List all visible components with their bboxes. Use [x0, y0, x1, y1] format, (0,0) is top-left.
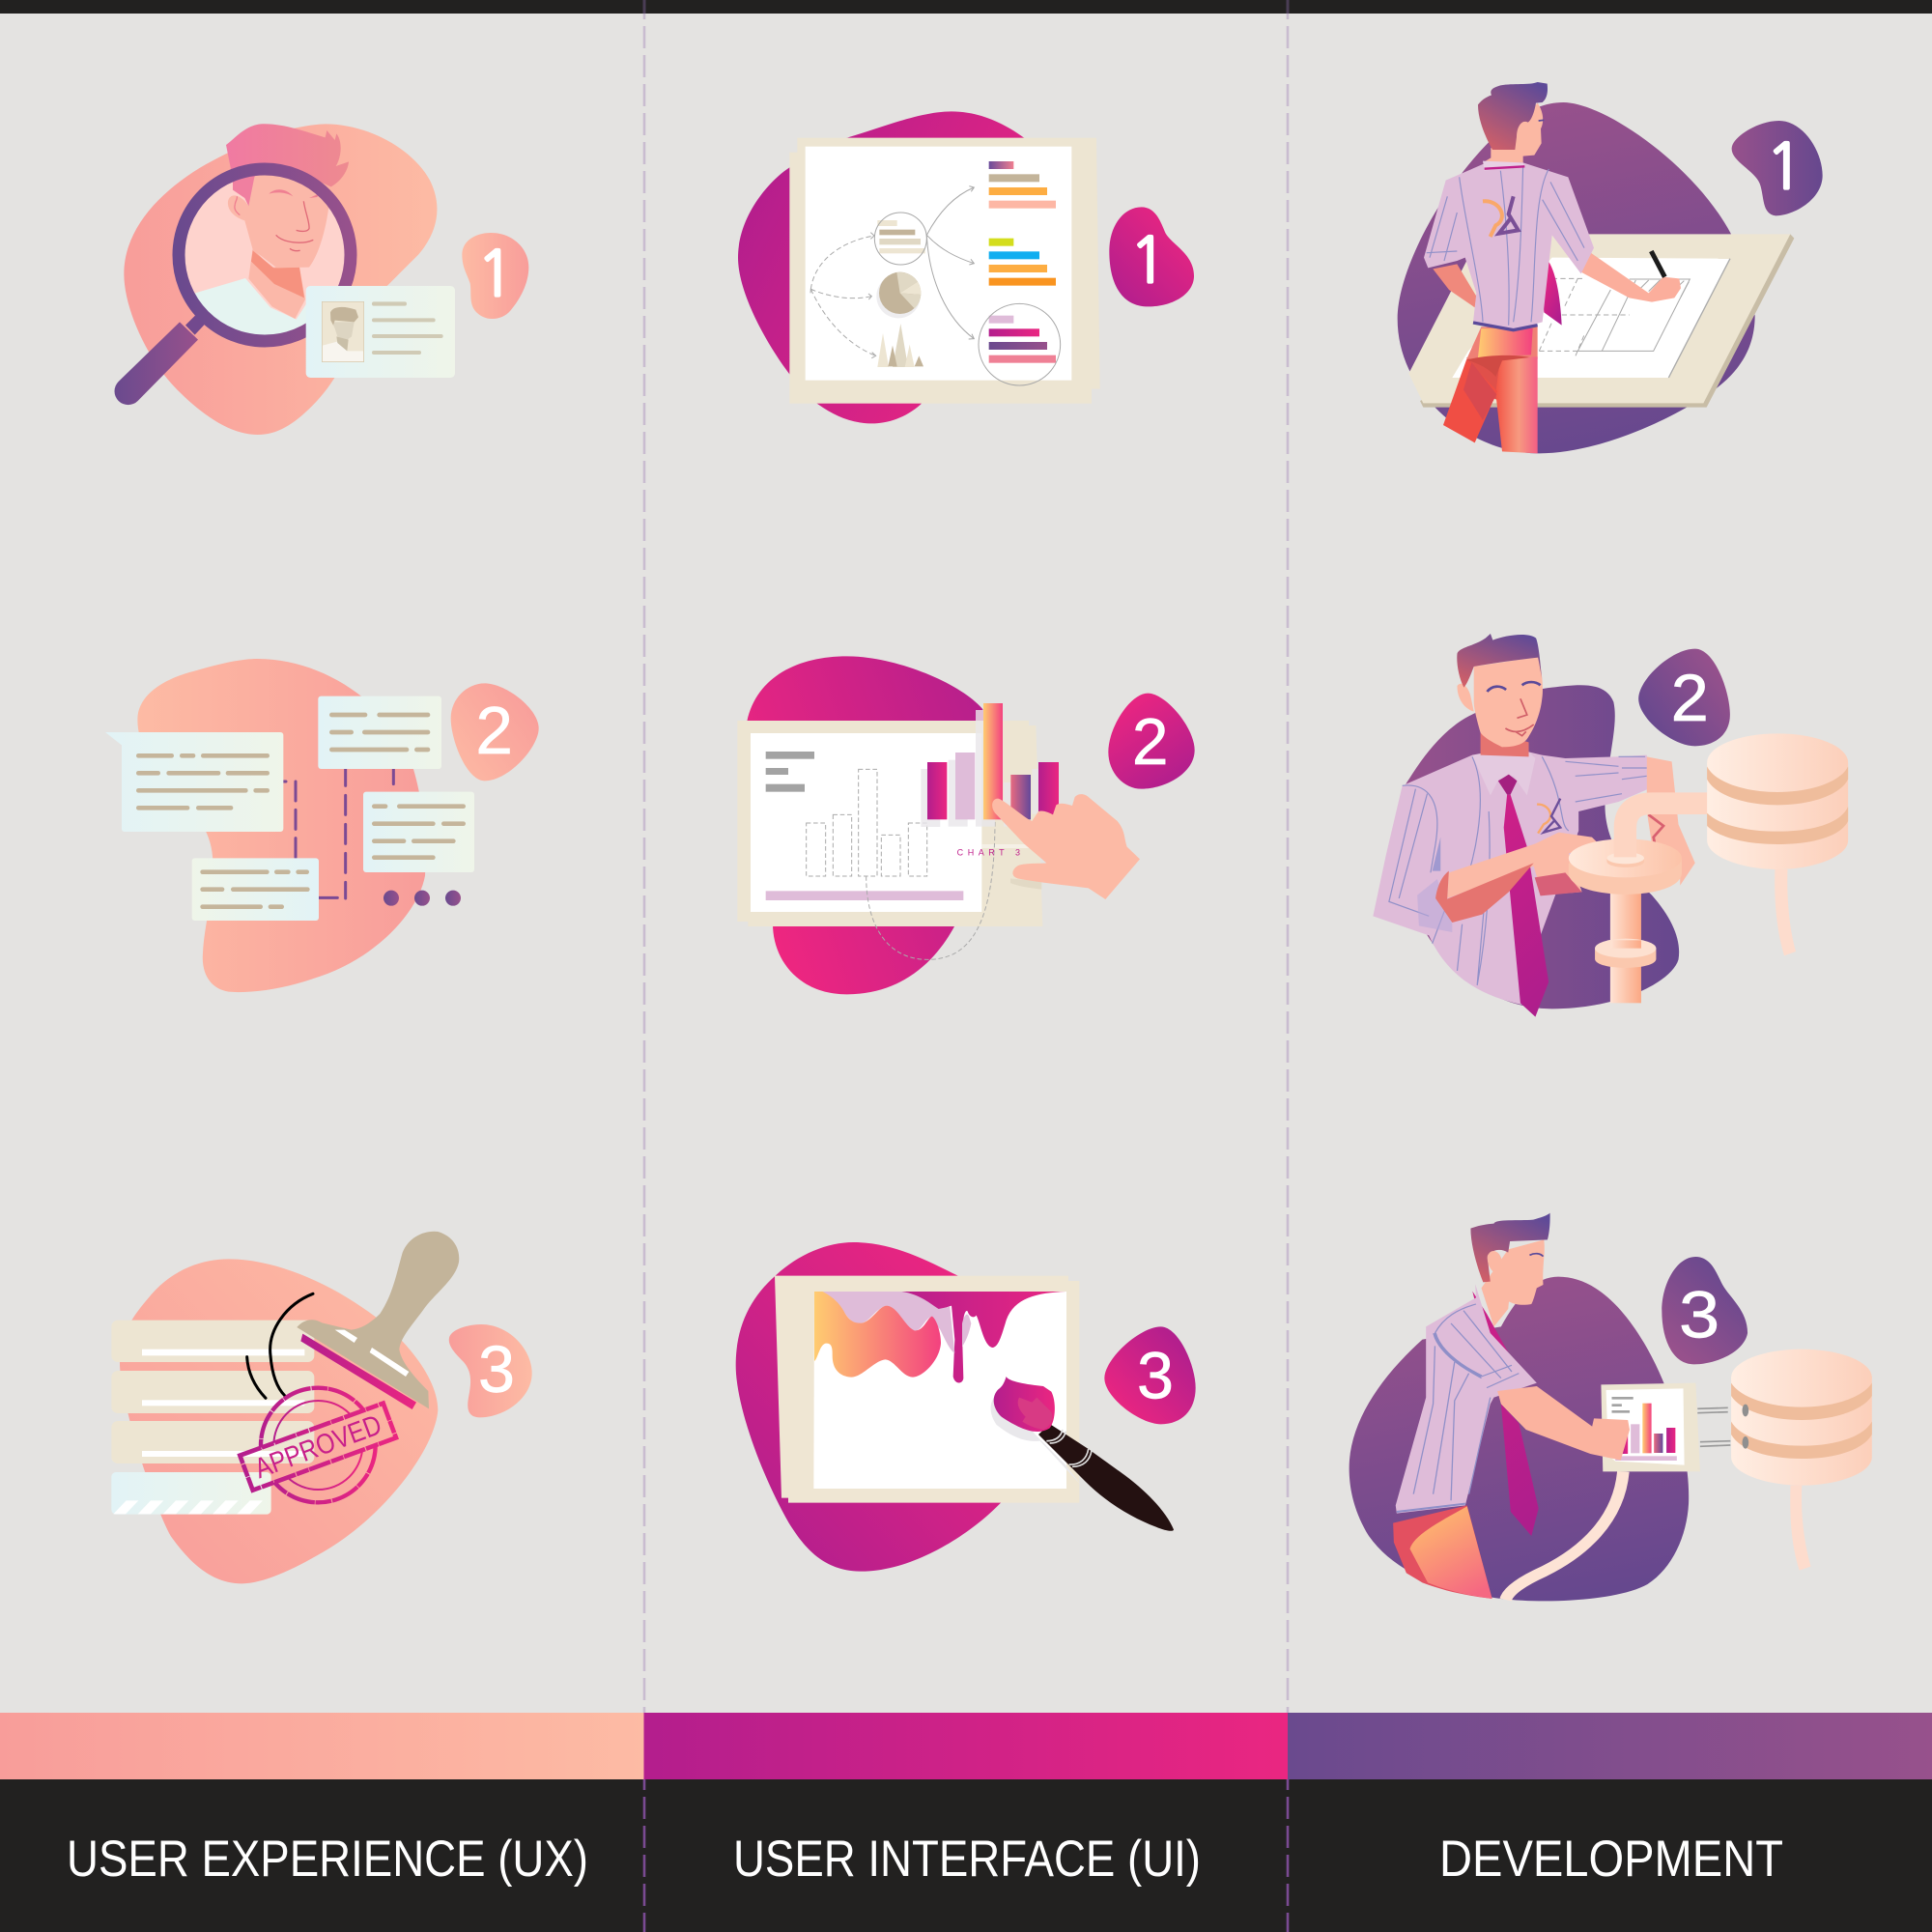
bar chart — [927, 703, 1059, 819]
illustration: UI 1 information architecture sheet — [738, 111, 1194, 423]
logo on shirt — [1537, 799, 1560, 834]
number badge 2: 2 — [1671, 661, 1709, 735]
approved stamp mark — [240, 1388, 396, 1502]
number badge 1 — [1732, 121, 1823, 215]
chart label: CHART 3 — [957, 848, 1020, 858]
hand — [992, 794, 1140, 899]
number badge 3 — [1104, 1326, 1196, 1424]
magnifier ring — [179, 169, 351, 341]
number badge 2 — [1108, 694, 1195, 789]
illustration: UX 2 connected speech cards — [105, 659, 539, 992]
shirt — [1373, 752, 1649, 1005]
blob — [120, 1259, 438, 1583]
illustration: UI 3 paint brush on canvas — [736, 1242, 1196, 1572]
number badge 1 — [462, 233, 528, 319]
number badge 1 — [1109, 207, 1194, 306]
paint brush — [991, 1377, 1174, 1531]
blob — [1398, 685, 1679, 1009]
illustration: Development 1 man drawing on drafting table — [1398, 82, 1823, 453]
card right — [363, 792, 474, 872]
number badge 3 — [449, 1324, 532, 1417]
plug prongs — [1697, 1407, 1730, 1446]
label: user experience: USER EXPERIENCE (UX) — [67, 1831, 588, 1888]
hair — [226, 124, 349, 186]
database — [1707, 733, 1848, 955]
illustration: Development 3 man plugging tablet into database — [1350, 1213, 1872, 1601]
lilac bar — [766, 891, 963, 900]
ID card — [306, 286, 455, 378]
number badge 3: 3 — [478, 1333, 515, 1406]
head — [1470, 1213, 1550, 1326]
head — [1478, 82, 1548, 171]
top bar — [0, 0, 1932, 14]
card top right — [318, 696, 441, 769]
drafting table — [1408, 234, 1794, 408]
label: user interface: USER INTERFACE (UI) — [733, 1831, 1201, 1888]
cable — [1506, 1471, 1623, 1600]
shirt — [1424, 162, 1594, 330]
stacked documents — [111, 1321, 314, 1515]
paint orange — [814, 1292, 941, 1378]
approved stamp mark: APPROVED — [250, 1408, 385, 1485]
footer bar — [0, 1779, 1932, 1932]
database — [1731, 1350, 1872, 1571]
blob — [738, 111, 1037, 423]
dashed placeholder bars — [807, 769, 995, 959]
paper frame — [737, 721, 1042, 926]
tie — [1472, 1292, 1539, 1536]
grey headings — [766, 752, 814, 792]
blob — [747, 656, 1037, 994]
canvas frame — [775, 1276, 1079, 1503]
card left speech bubble — [105, 732, 283, 832]
colour band: development — [1288, 1713, 1932, 1779]
footer dividers — [644, 1779, 1288, 1932]
number badge 3 — [1662, 1257, 1747, 1364]
paint lilac — [823, 1292, 971, 1353]
dashed connectors — [283, 766, 393, 898]
lens glass — [185, 175, 345, 335]
pants — [1393, 1505, 1492, 1599]
arms — [1433, 253, 1681, 307]
pie chart — [876, 272, 921, 318]
tablet — [1601, 1383, 1700, 1471]
colour band: user experience — [0, 1713, 643, 1779]
blueprint lines — [1539, 278, 1690, 355]
bar list middle — [989, 239, 1056, 286]
label: development: DEVELOPMENT — [1439, 1831, 1783, 1888]
arm and hand — [1497, 1386, 1630, 1461]
valve pipe — [1569, 804, 1719, 1003]
blob — [736, 1242, 1002, 1572]
peak chart — [877, 324, 923, 367]
blob — [137, 659, 426, 992]
face in lens — [195, 176, 328, 334]
number badge 1: 1 — [476, 243, 515, 306]
shirt — [1396, 1284, 1537, 1514]
motion arcs — [247, 1293, 313, 1398]
dashed arrows — [810, 233, 876, 358]
tie — [1543, 259, 1562, 326]
three dots — [384, 891, 461, 906]
blob — [124, 124, 437, 435]
solid arrows — [926, 186, 974, 339]
number badge 3: 3 — [1137, 1340, 1174, 1413]
number badge 2 — [1638, 649, 1730, 746]
illustration: UI 2 hand selecting chart bar — [737, 656, 1195, 994]
circled list — [874, 213, 926, 265]
magnifier handle — [115, 316, 205, 405]
illustration: Development 2 man connecting pipe to database — [1373, 634, 1848, 1017]
number badge 2: 2 — [1132, 706, 1168, 779]
stamp tool — [297, 1232, 459, 1409]
number badge 2: 2 — [475, 693, 513, 768]
blob — [1398, 102, 1755, 453]
bar list bottom with circle — [979, 303, 1061, 385]
colour band: user interface — [643, 1713, 1288, 1779]
head — [1457, 634, 1543, 756]
tie — [1498, 775, 1548, 1017]
arms — [1435, 756, 1695, 923]
bar shadows — [921, 710, 1051, 827]
paper frame — [789, 138, 1100, 404]
pants — [1443, 327, 1538, 453]
number badge 1: 1 — [1766, 135, 1804, 198]
illustration: UX 3 approved stamp on documents — [111, 1232, 532, 1583]
illustration: UX 1 magnifier over user face and ID card — [115, 124, 528, 435]
number badge 3: 3 — [1679, 1279, 1719, 1351]
paint magenta — [889, 1292, 1065, 1382]
logo on shirt back — [1483, 196, 1519, 237]
number badge 1: 1 — [1129, 229, 1167, 292]
column dividers — [643, 0, 1289, 1713]
card bottom — [192, 858, 319, 921]
blob — [1350, 1277, 1689, 1601]
bar list top — [989, 161, 1056, 209]
number badge 2 — [451, 683, 539, 781]
pen — [1651, 251, 1664, 277]
